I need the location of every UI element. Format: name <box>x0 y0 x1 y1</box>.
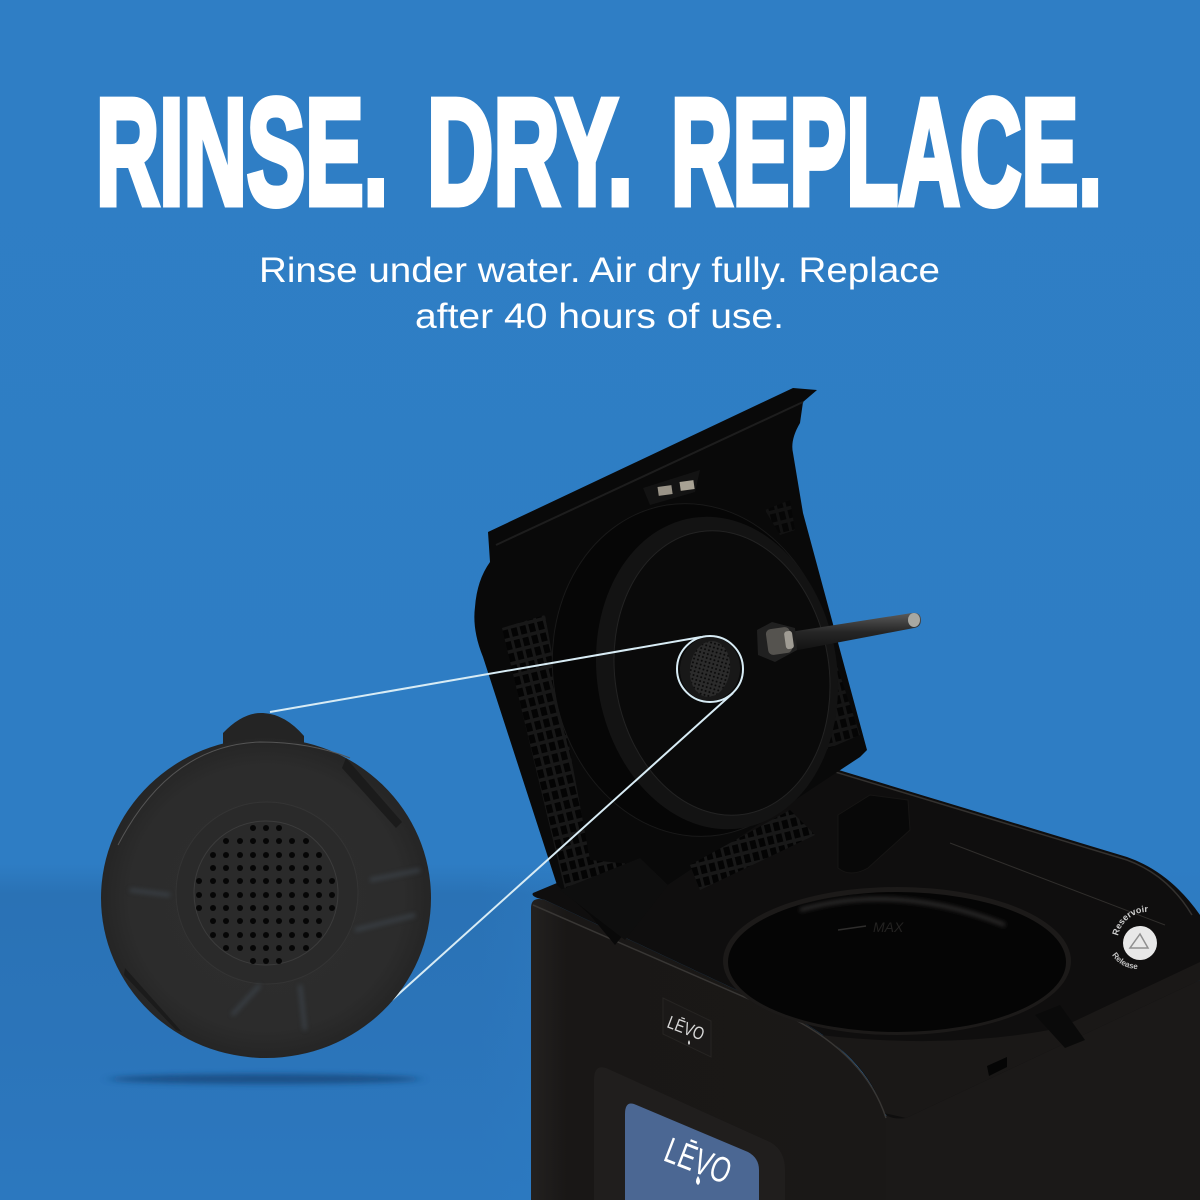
filter shadow <box>110 1074 420 1084</box>
device: open lid <box>474 388 921 945</box>
callout lines <box>270 636 743 1000</box>
subtitle: Rinse under water. Air dry fully. Replace <box>259 251 940 290</box>
filter light streaks <box>130 870 420 1030</box>
post <box>838 795 910 873</box>
device: water reservoir base <box>531 770 1200 1200</box>
filter notches <box>342 758 402 828</box>
reservoir max mark: MAX <box>873 919 904 935</box>
base right face <box>880 980 1200 1200</box>
reservoir release button <box>1112 906 1157 969</box>
logo badge: LĒVO <box>665 1012 707 1044</box>
hinge block <box>560 858 668 940</box>
subtitle: after 40 hours of use. <box>415 297 784 336</box>
reservoir opening <box>723 887 1071 1035</box>
filter holes <box>196 825 335 964</box>
display panel <box>594 1067 785 1200</box>
sensor probe <box>757 613 921 662</box>
logo badge <box>663 998 711 1057</box>
gasket disc <box>574 499 860 847</box>
lid grid right <box>825 660 860 750</box>
base top surface <box>532 768 1200 1118</box>
reservoir release button: Reservoir <box>1112 906 1148 936</box>
magnets <box>643 470 700 505</box>
title <box>96 67 1102 236</box>
lid shell <box>474 388 867 945</box>
filter body <box>101 738 431 1058</box>
lid grid top <box>765 500 795 535</box>
base front face <box>531 899 886 1200</box>
display logo: LĒVO <box>659 1129 737 1192</box>
lid grid lower <box>690 810 815 890</box>
filter raised centre <box>176 802 358 984</box>
display screen <box>625 1103 759 1200</box>
hinge latch <box>1035 1005 1085 1048</box>
title: DRY. <box>427 67 633 236</box>
lid grid left <box>502 615 640 895</box>
vent <box>676 633 744 705</box>
filter tab <box>223 713 304 760</box>
slot <box>987 1057 1007 1076</box>
filter close-up <box>101 713 431 1058</box>
gasket ghost ring <box>529 483 857 857</box>
title: RINSE. <box>96 67 388 236</box>
reservoir release button: Release <box>1112 952 1138 969</box>
subtitle <box>259 251 940 336</box>
